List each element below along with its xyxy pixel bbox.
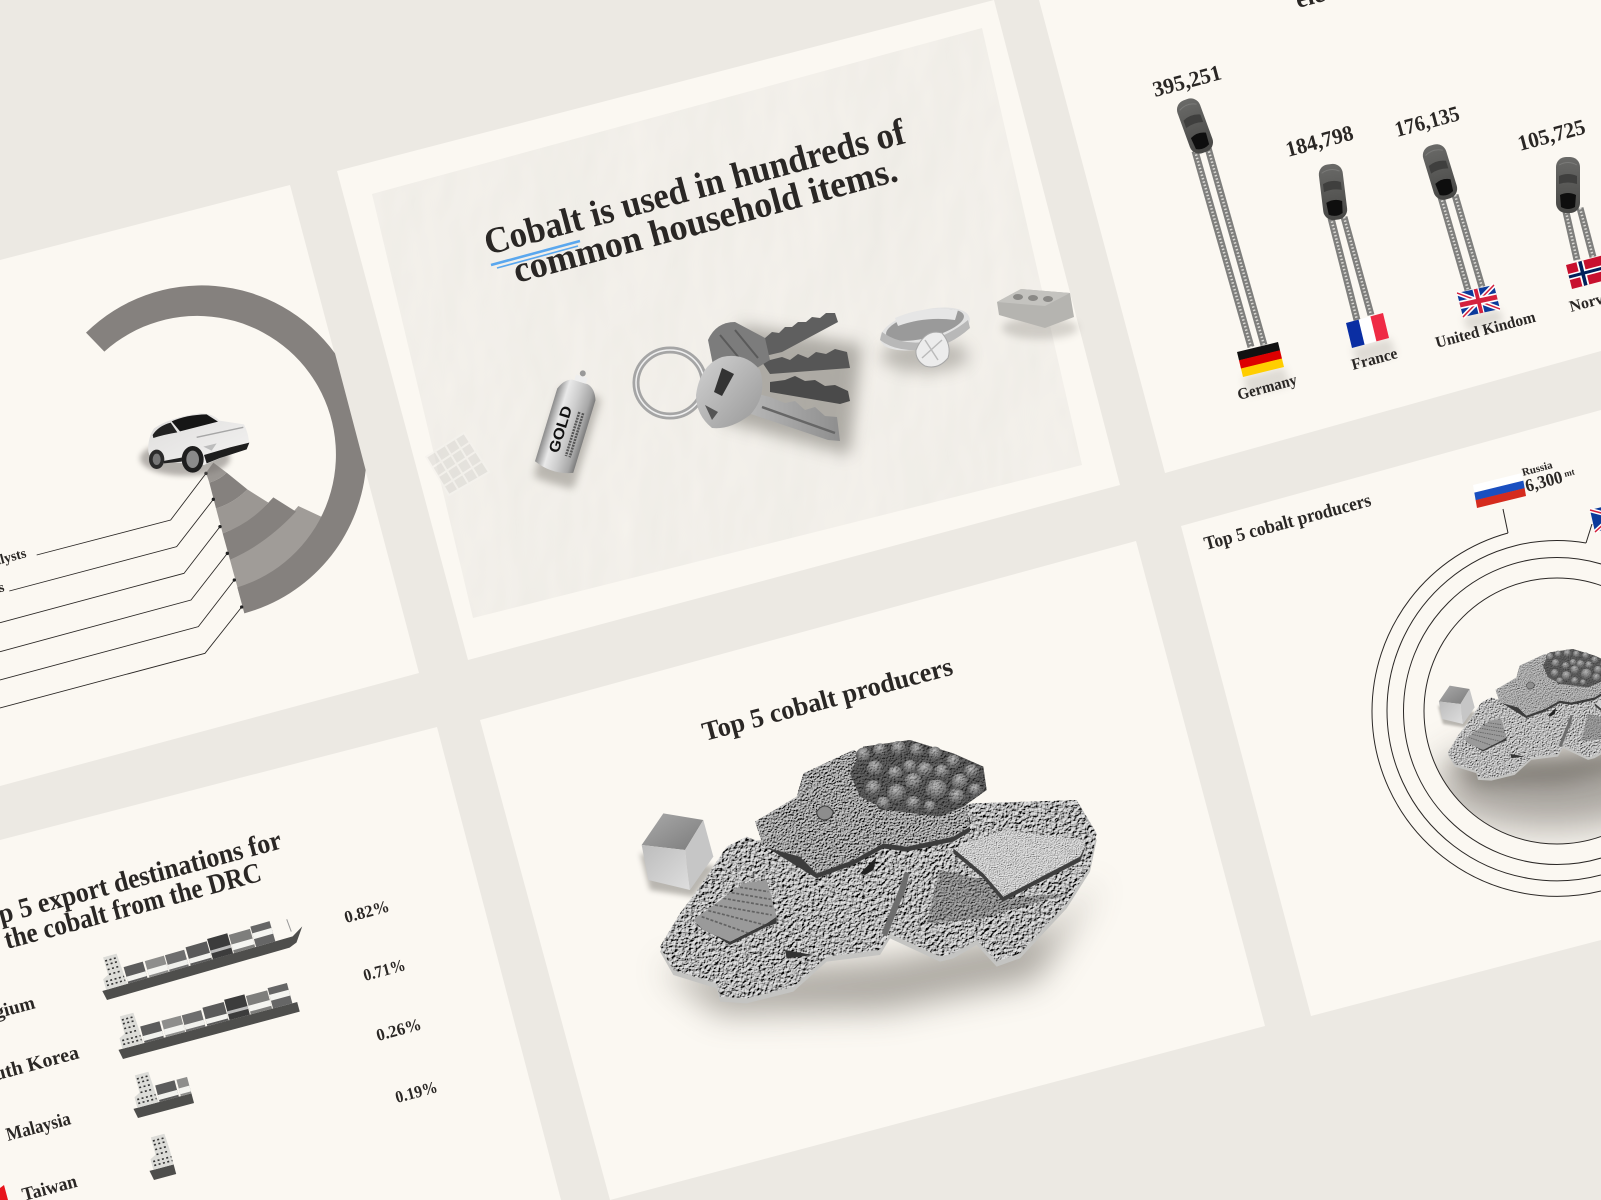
- ship bar: [134, 1072, 194, 1118]
- value: 395,251: [1150, 60, 1224, 102]
- panel: top 5 export destinations: [0, 727, 561, 1200]
- car: [1318, 163, 1348, 221]
- leader lines: [0, 473, 242, 708]
- icon: keys: [636, 313, 862, 455]
- row: Taiwan: [0, 1077, 440, 1200]
- column: Norway: [1515, 114, 1601, 316]
- inner ring shadow: [1435, 743, 1601, 827]
- column: Germany: [1150, 60, 1299, 404]
- tyre tracks: [1441, 195, 1482, 290]
- leader dots: [204, 472, 243, 609]
- label: France: [1350, 345, 1399, 374]
- icon: spray can: GOLD: [546, 404, 576, 455]
- value: 105,725: [1515, 114, 1588, 156]
- value: 0.26%: [374, 1015, 423, 1045]
- ship bar: [118, 983, 300, 1059]
- panel: household items: [337, 0, 1120, 660]
- icon: white SUV: [140, 413, 249, 476]
- car: [1420, 142, 1460, 202]
- panel: top 5 cobalt producers, large map: [480, 541, 1265, 1200]
- callout: Russia: Russia: [1521, 459, 1554, 479]
- flag: France: [1346, 313, 1396, 364]
- icon: diamond ring: [876, 299, 974, 372]
- key ring: [636, 350, 704, 416]
- heading: Top 5 cobalt producers: [1202, 490, 1373, 555]
- crumpled paper texture: [372, 28, 1082, 618]
- tyre tracks: [1331, 217, 1371, 320]
- flag: UK clipped: [1590, 500, 1601, 532]
- heading: Cobalt is used in hundreds of: [480, 112, 910, 264]
- ship bar: [150, 1134, 176, 1180]
- heading: the cobalt from the DRC: [1, 857, 265, 956]
- label: United Kindom: [1434, 309, 1538, 352]
- tyre tracks: [1566, 208, 1593, 260]
- flag: Russia: [1473, 473, 1526, 508]
- flag: UK: [1457, 285, 1504, 331]
- tyre tracks: [1195, 148, 1264, 347]
- icon: circuit grid: [426, 433, 489, 495]
- production rings: [1372, 509, 1601, 896]
- panel: electric car sales by country: [1039, 0, 1601, 473]
- value: 0.71%: [361, 955, 408, 985]
- ship bar: [94, 902, 307, 1001]
- icon: spray can: [530, 365, 608, 490]
- car: [1174, 96, 1216, 156]
- callout: Russia: [1521, 459, 1576, 496]
- value: 0.82%: [342, 897, 391, 927]
- flag: Norway: [1566, 255, 1601, 289]
- row: Belgium: [0, 897, 391, 1030]
- icon: cinder block: [997, 289, 1078, 339]
- value: 176,135: [1392, 101, 1462, 142]
- column: France: [1283, 120, 1399, 374]
- flag: Germany: [1237, 342, 1290, 395]
- heading: common household items.: [509, 150, 902, 292]
- cobalt rock map: [640, 740, 1100, 1013]
- blue underline: [491, 241, 580, 268]
- label: Germany: [1236, 372, 1299, 404]
- row: Malaysia: [4, 1015, 423, 1146]
- callout: Russia: mt: [1563, 467, 1576, 479]
- cobalt rock map small: [1438, 649, 1601, 786]
- column: United Kingdom: [1392, 101, 1538, 352]
- radial chart: [0, 285, 366, 708]
- panel: top 5 cobalt producers, ring chart: [1181, 410, 1601, 1016]
- value: 184,798: [1283, 120, 1356, 162]
- row: South Korea: [0, 960, 404, 1080]
- row: Malaysia: Malaysia: [4, 1108, 73, 1146]
- callout: Russia: 6,300: [1523, 467, 1565, 496]
- value: 0.19%: [393, 1077, 440, 1107]
- heading: Top 5 cobalt producers: [699, 651, 956, 747]
- car: [1556, 157, 1580, 213]
- panel: electric vehicle supply chain: [0, 185, 419, 786]
